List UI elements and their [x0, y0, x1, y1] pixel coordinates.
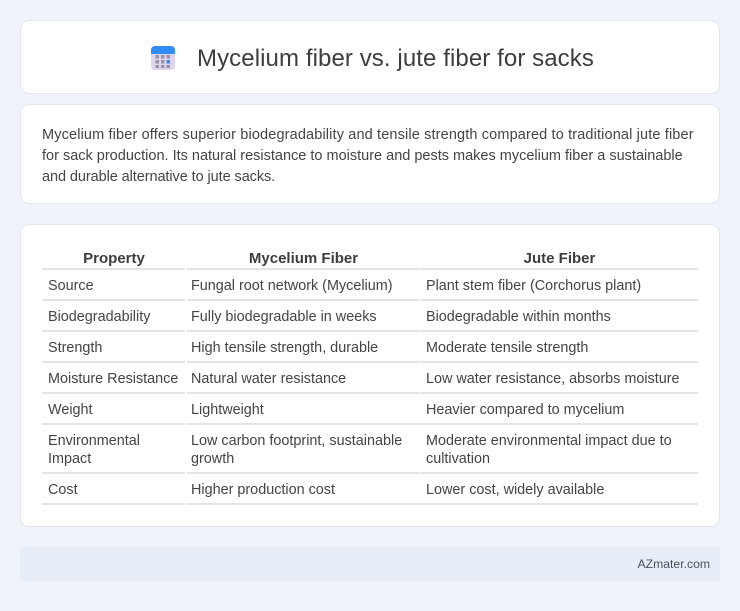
row: cost: Higher production cost	[191, 482, 335, 498]
table header: Jute Fiber	[524, 250, 595, 267]
row: cost	[48, 482, 604, 498]
title panel	[20, 20, 720, 94]
row: source: Source	[48, 278, 94, 294]
summary text: Mycelium fiber offers superior biodegradability and tensile strength compared to traditional jute fiber	[42, 127, 694, 143]
footer bar	[20, 547, 720, 581]
summary panel	[20, 104, 720, 204]
table header: Property	[83, 250, 145, 267]
row: biodegradability: Biodegradability	[48, 309, 150, 325]
table header: Mycelium Fiber	[249, 250, 358, 267]
row: strength: Strength	[48, 340, 102, 356]
footer credit: AZmater.com	[638, 557, 710, 571]
row: source: Plant stem fiber (Corchorus plant)	[426, 278, 641, 294]
summary text	[42, 127, 694, 185]
summary text: for sack production. Its natural resistance to moisture and pests makes mycelium fiber a sustainable	[42, 148, 683, 164]
row: moisture resistance: Moisture Resistance	[48, 371, 178, 387]
row: environmental impact: growth	[191, 451, 234, 467]
row: moisture resistance	[48, 371, 680, 387]
row: weight: Heavier compared to mycelium	[426, 402, 624, 418]
comparison table panel	[20, 224, 720, 527]
icon: calendar	[151, 46, 175, 70]
row: weight: Lightweight	[191, 402, 264, 418]
row: environmental impact: cultivation	[426, 451, 490, 467]
row: moisture resistance: Natural water resistance	[191, 371, 346, 387]
row: environmental impact	[48, 433, 672, 467]
row: strength: Moderate tensile strength	[426, 340, 588, 356]
table header	[83, 250, 596, 267]
row: cost: Cost	[48, 482, 78, 498]
title: Mycelium fiber vs. jute fiber for sacks	[197, 45, 594, 72]
row: moisture resistance: Low water resistance, absorbs moisture	[426, 371, 680, 387]
row: strength	[48, 340, 588, 356]
summary text: and durable alternative to jute sacks.	[42, 169, 275, 185]
row: environmental impact: Low carbon footprint, sustainable	[191, 433, 402, 449]
row: cost: Lower cost, widely available	[426, 482, 604, 498]
row: strength: High tensile strength, durable	[191, 340, 378, 356]
row: biodegradability: Fully biodegradable in weeks	[191, 309, 377, 325]
row: environmental impact: Impact	[48, 451, 91, 467]
row: weight	[48, 402, 624, 418]
row: biodegradability	[48, 309, 611, 325]
row: source	[48, 278, 641, 294]
row: weight: Weight	[48, 402, 93, 418]
row: biodegradability: Biodegradable within months	[426, 309, 611, 325]
row: environmental impact: Environmental	[48, 433, 140, 449]
row: source: Fungal root network (Mycelium)	[191, 278, 393, 294]
row: environmental impact: Moderate environmental impact due to	[426, 433, 672, 449]
